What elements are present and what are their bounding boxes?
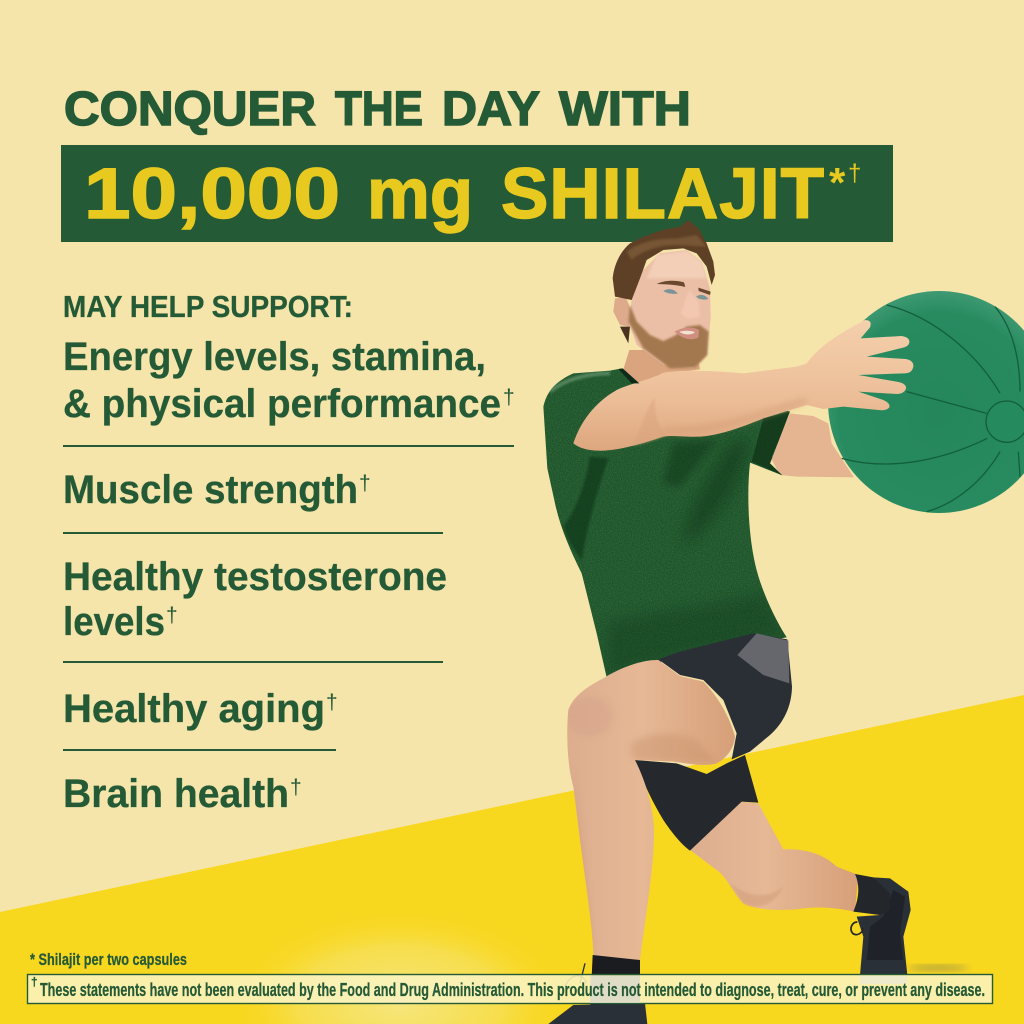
far arm bbox=[770, 413, 854, 477]
laces bbox=[565, 963, 587, 987]
fda disclaimer box: † bbox=[31, 975, 38, 989]
banner: 10,000 mg shilajit: mg bbox=[367, 155, 473, 234]
benefit: healthy aging: † bbox=[326, 691, 338, 714]
lace loop bbox=[851, 922, 863, 935]
heading: conquer the day with: DAY bbox=[442, 83, 540, 136]
front leg shading bbox=[567, 697, 717, 957]
benefit: muscle strength: † bbox=[359, 472, 371, 495]
face bbox=[628, 250, 711, 368]
heading: conquer the day with: CONQUER bbox=[64, 83, 316, 136]
front thigh and shin bbox=[567, 660, 735, 960]
benefit: energy levels: & physical performance bbox=[63, 382, 501, 426]
back hair bbox=[620, 327, 630, 343]
heading: conquer the day with: WITH bbox=[559, 83, 691, 136]
benefit: healthy testosterone: levels bbox=[63, 600, 165, 644]
front shoe bbox=[548, 1003, 647, 1024]
subheading: may help support: MAY HELP SUPPORT: bbox=[63, 289, 353, 324]
banner: 10,000 mg shilajit: * bbox=[829, 159, 846, 206]
shirt bbox=[540, 367, 793, 680]
lower body bbox=[567, 633, 858, 960]
banner: 10,000 mg shilajit: † bbox=[848, 160, 861, 187]
collar bbox=[618, 368, 639, 383]
beard bbox=[628, 305, 709, 368]
mouth bbox=[675, 328, 699, 339]
heading: conquer the day with bbox=[64, 83, 691, 136]
banner: 10,000 mg shilajit: 10,000 bbox=[84, 155, 340, 234]
benefit: brain health: † bbox=[290, 776, 302, 799]
nose bbox=[681, 290, 700, 319]
head bbox=[613, 220, 715, 383]
eyes bbox=[663, 289, 708, 300]
lower shorts bbox=[635, 755, 758, 851]
front sock bbox=[590, 955, 640, 1017]
benefit: healthy testosterone: † bbox=[166, 604, 178, 627]
upper shorts bbox=[658, 633, 792, 759]
banner: 10,000 mg shilajit: SHILAJIT bbox=[501, 155, 824, 234]
banner: 10,000 mg shilajit bbox=[61, 145, 893, 242]
hair bbox=[613, 220, 715, 300]
ear bbox=[613, 298, 632, 327]
shorts grey panel bbox=[737, 633, 789, 683]
main arm and hand bbox=[573, 320, 913, 451]
benefit: healthy testosterone bbox=[63, 555, 447, 644]
benefit: brain health: Brain health bbox=[63, 772, 289, 816]
front sock and shoe bbox=[548, 955, 647, 1024]
sock bbox=[853, 874, 890, 915]
man with medicine ball bbox=[540, 220, 1024, 1024]
benefit: energy levels: Energy levels, stamina, bbox=[63, 335, 486, 379]
benefit: energy levels: † bbox=[503, 386, 515, 409]
brows bbox=[657, 281, 711, 295]
yellow diagonal floor bbox=[0, 695, 1024, 1024]
upper body bbox=[540, 291, 1024, 680]
neck bbox=[623, 350, 700, 384]
fda disclaimer box bbox=[28, 974, 992, 1004]
shoe body bbox=[857, 877, 911, 975]
footnote: per two capsules: * Shilajit per two capsules bbox=[30, 950, 187, 969]
medicine ball bbox=[828, 291, 1024, 513]
heading: conquer the day with: THE bbox=[335, 83, 423, 136]
benefit: healthy testosterone: Healthy testosterone bbox=[63, 555, 447, 599]
benefit: muscle strength: Muscle strength bbox=[63, 468, 358, 512]
back leg bbox=[690, 802, 858, 912]
back shoe and sock bbox=[851, 874, 911, 975]
floor glow bbox=[225, 915, 575, 1024]
benefit: healthy aging: Healthy aging bbox=[63, 687, 325, 731]
benefit: energy levels bbox=[63, 335, 515, 426]
shoe shadow bbox=[908, 964, 968, 972]
back knee shading bbox=[730, 883, 783, 906]
